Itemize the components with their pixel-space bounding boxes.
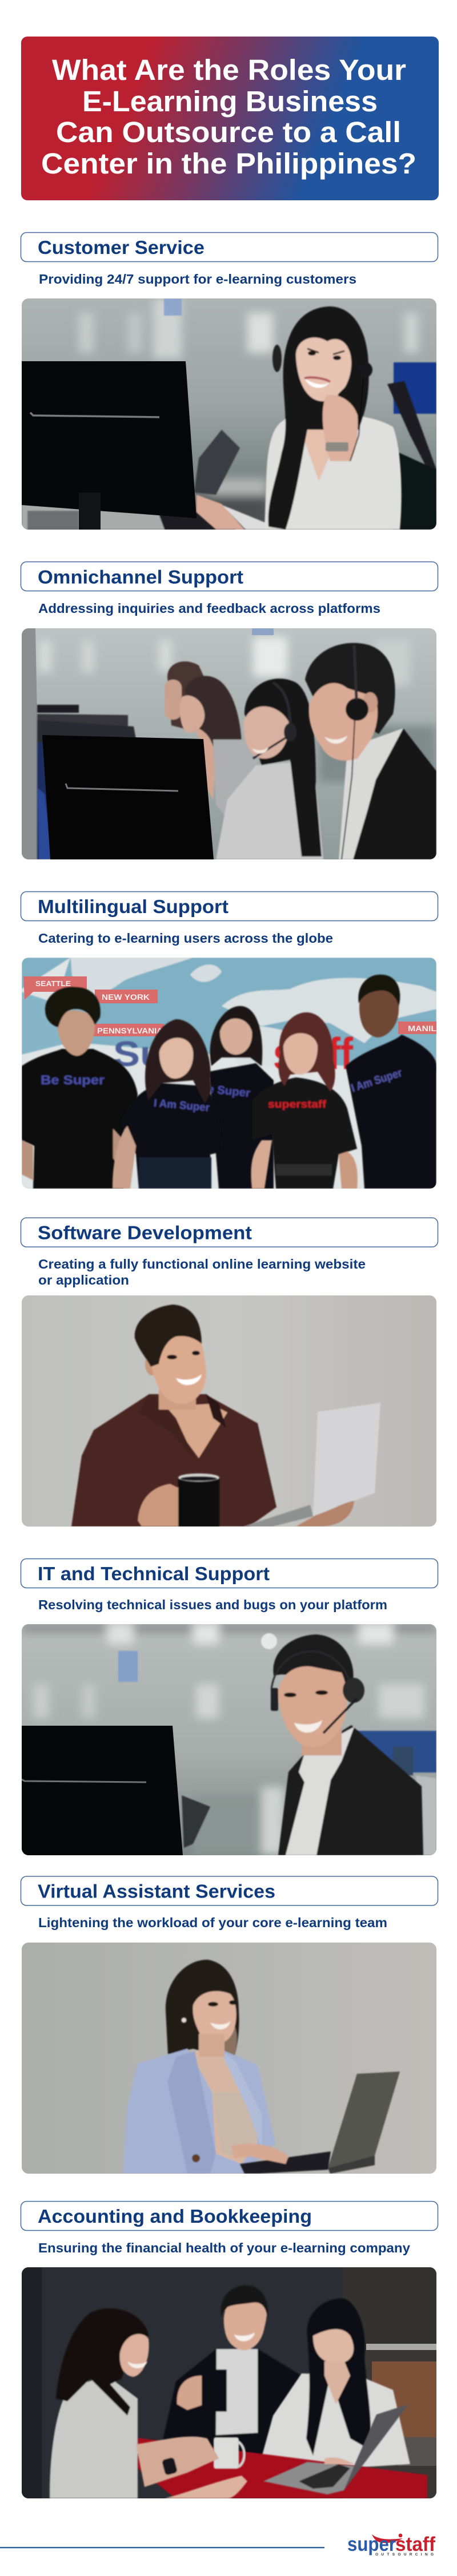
description: Omnichannel Support: Addressing inquiries and feedback across platforms (38, 601, 380, 616)
title banner: E-Learning Business (82, 85, 378, 118)
man with headset (271, 1634, 423, 1855)
heading: Multilingual Support (21, 891, 438, 921)
heading: Virtual Assistant Services: Virtual Assistant Services (38, 1881, 275, 1901)
description: Multilingual Support: Catering to e-learning users across the globe (38, 931, 333, 946)
city tags: MANIL (408, 1024, 437, 1033)
panel: Accounting and Bookkeeping (21, 2202, 438, 2498)
description: Accounting and Bookkeeping: Ensuring the financial health of your e-learning company (38, 2240, 410, 2255)
man with headset (305, 643, 436, 859)
man right: I Am Super (350, 1067, 404, 1095)
white mug (214, 2437, 244, 2469)
photo: agent with headset at monitor (22, 298, 436, 530)
heading: Accounting and Bookkeeping: Accounting and Bookkeeping (38, 2206, 312, 2227)
panel: IT and Technical Support (21, 1559, 438, 1855)
man right (346, 975, 436, 1189)
panel: Virtual Assistant Services (21, 1876, 438, 2174)
agent third with headset (216, 679, 323, 859)
man left (22, 987, 138, 1189)
woman second back: e Super (207, 1083, 251, 1100)
title banner: What Are the Roles Your (52, 54, 406, 86)
panel: Omnichannel Support (21, 562, 438, 859)
heading: Software Development: Software Development (38, 1222, 252, 1243)
heading: Customer Service (21, 233, 438, 261)
panel: Software Development (21, 1218, 438, 1527)
laptop (243, 1403, 380, 1527)
woman left front: I Am Super (153, 1097, 210, 1114)
back monitors (37, 705, 137, 859)
logo: Superstaff Outsourcing: staff (395, 2533, 435, 2555)
heading: Accounting and Bookkeeping (21, 2202, 438, 2230)
panel: Customer Service (21, 233, 438, 530)
photo: smiling technical agent (22, 1624, 436, 1855)
logo swoosh (372, 2534, 403, 2543)
heading: IT and Technical Support: IT and Technical Support (38, 1563, 270, 1584)
heading: Virtual Assistant Services (21, 1876, 438, 1905)
woman right front: superstaff (268, 1099, 327, 1110)
woman (123, 1960, 275, 2174)
description: Virtual Assistant Services: Lightening the workload of your core e-learning team (38, 1915, 387, 1930)
Superstaff sign (113, 1028, 354, 1079)
blue desk partition (351, 1731, 436, 1855)
Superstaff sign: Su (113, 1035, 165, 1074)
city tags: NEW YORK (102, 992, 150, 1002)
city tags: PENNSYLVANIA (97, 1026, 163, 1035)
blue partition (394, 362, 436, 414)
photo: row of call center agents (22, 628, 436, 859)
city tags: SEATTLE (35, 979, 71, 988)
heading: Customer Service: Customer Service (38, 237, 205, 258)
man in maroon shirt (71, 1305, 276, 1527)
pillar (22, 628, 38, 859)
heading: Omnichannel Support (21, 562, 438, 591)
description: Software Development: or application (38, 1273, 129, 1287)
man in the middle (159, 2286, 302, 2456)
monitor (22, 1726, 210, 1855)
photo: team in front of world map (22, 958, 437, 1189)
heading: IT and Technical Support (21, 1559, 438, 1588)
woman with headset (197, 306, 402, 530)
heading: Omnichannel Support: Omnichannel Support (38, 566, 243, 588)
main monitor (42, 735, 214, 859)
woman on the left (50, 2308, 247, 2498)
title banner: Center in the Philippines? (41, 147, 416, 180)
desk and keyboard (22, 503, 244, 530)
world map (22, 958, 436, 1072)
agent far back (164, 660, 205, 729)
mug and hand (138, 1473, 219, 1527)
red table (138, 2438, 427, 2498)
photo: three colleagues at a red table (22, 2267, 436, 2498)
logo: Superstaff Outsourcing: OUTSOURCING (375, 2553, 434, 2557)
photo: woman in lilac blazer with laptop (22, 1943, 436, 2174)
woman left front (113, 1019, 223, 1189)
logo: Superstaff Outsourcing (347, 2533, 435, 2557)
chairs (194, 381, 436, 530)
description: Software Development: Creating a fully functional online learning website (38, 1257, 366, 1271)
panel: Multilingual Support (21, 891, 438, 1189)
Superstaff sign: staff (273, 1028, 354, 1079)
heading: Software Development (21, 1218, 438, 1247)
title banner: Can Outsource to a Call (56, 116, 401, 148)
monitor (22, 361, 197, 530)
woman second back (207, 1006, 274, 1189)
description: IT and Technical Support: Resolving technical issues and bugs on your platform (38, 1597, 387, 1612)
description: Software Development (38, 1257, 366, 1287)
woman right front (251, 1012, 358, 1189)
description: Customer Service: Providing 24/7 support for e-learning customers (39, 272, 356, 286)
laptop (231, 2072, 400, 2174)
logo: Superstaff Outsourcing: super (347, 2533, 396, 2555)
title banner (21, 37, 439, 200)
man left: Be Super (41, 1073, 105, 1087)
woman on the right (260, 2299, 410, 2481)
footer rule (0, 2547, 324, 2548)
city tags (23, 976, 437, 1036)
laptop (263, 2404, 408, 2494)
agent second (180, 676, 257, 825)
photo: man with mug and laptop (22, 1295, 436, 1527)
heading: Multilingual Support: Multilingual Support (38, 896, 228, 917)
